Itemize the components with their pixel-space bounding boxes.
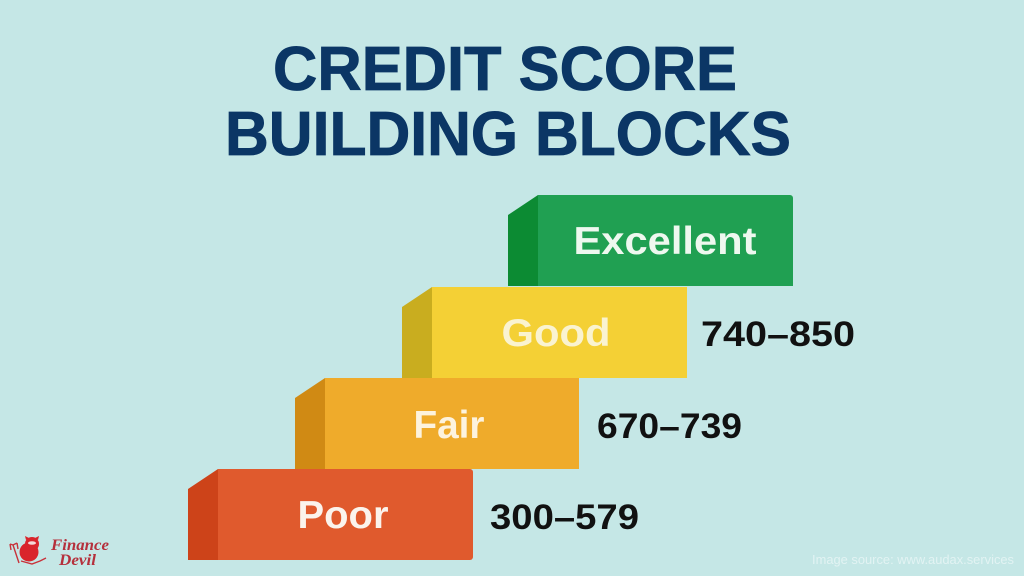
wordmark: Finance	[50, 537, 109, 554]
block: Good	[402, 287, 687, 378]
block: Fair: Fair	[414, 404, 484, 447]
title: BUILDING BLOCKS	[225, 100, 791, 169]
logo: Finance Devil	[10, 536, 109, 569]
wordmark: Devil	[58, 552, 97, 569]
block: Good: Good	[502, 312, 610, 355]
block: Fair	[295, 378, 579, 469]
label: 300-579: 300–579	[490, 498, 639, 537]
block: Excellent	[508, 195, 793, 286]
block: Poor: Poor	[298, 494, 388, 537]
wordmark	[50, 537, 109, 569]
title	[225, 35, 791, 169]
icon: devil mascot	[10, 536, 46, 564]
label: 740-850: 740–850	[701, 315, 855, 354]
label: 670-739: 670–739	[597, 407, 742, 446]
title: CREDIT SCORE	[273, 35, 737, 104]
block: Poor	[188, 469, 473, 560]
image source credit: Image source: www.audax.services	[812, 553, 1014, 567]
block: Excellent: Excellent	[574, 220, 757, 263]
